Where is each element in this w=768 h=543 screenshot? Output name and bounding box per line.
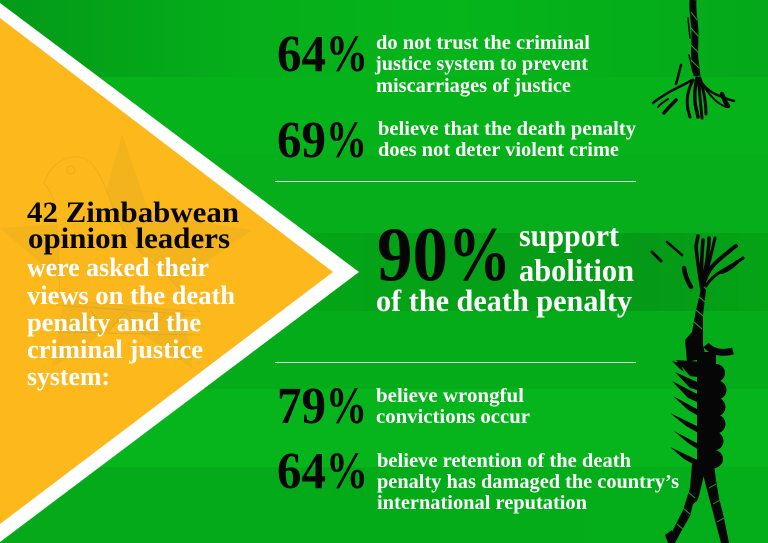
stat: 69% deter: % xyxy=(326,112,367,169)
left intro text xyxy=(27,253,236,391)
left heading xyxy=(27,196,239,255)
stat: 64% trust: justice system to prevent xyxy=(374,53,588,75)
noose: loose strand xyxy=(706,345,733,352)
stat: 90% abolition: of the death penalty xyxy=(376,283,632,318)
white arrow border xyxy=(0,3,359,542)
noose: frayed end xyxy=(652,236,743,290)
stat: 64% trust: 64 xyxy=(277,26,326,83)
noose: lower ropes xyxy=(668,464,706,543)
stat: 64% reputation xyxy=(277,443,679,514)
stat: 69% deter: 69 xyxy=(277,112,326,169)
stat: 90% abolition: abolition xyxy=(519,252,634,288)
icon: noose xyxy=(652,236,743,543)
noose: rope stem xyxy=(685,285,706,362)
stat: 79% wrongful: convictions occur xyxy=(376,406,530,428)
stat: 64% reputation: international reputation xyxy=(377,492,587,514)
stat: 64% trust: do not trust the criminal xyxy=(376,32,590,54)
left intro text: system: xyxy=(27,362,110,391)
stat: 79% wrongful: 79 xyxy=(277,378,326,435)
stat: 64% reputation: % xyxy=(326,443,368,500)
stat: 64% trust: miscarriages of justice xyxy=(376,75,571,97)
stat: 64% trust xyxy=(277,26,590,97)
stat: 64% reputation: penalty has damaged the country’s xyxy=(377,471,679,493)
left intro text: views on the death xyxy=(27,281,236,310)
stat: 64% trust: % xyxy=(326,26,368,83)
left heading: opinion leaders xyxy=(28,222,230,255)
left intro text: criminal justice xyxy=(27,335,203,364)
yellow arrow panel xyxy=(0,18,333,524)
stat: 79% wrongful: believe wrongful xyxy=(376,385,524,407)
stat: 69% deter: does not deter violent crime xyxy=(378,139,619,161)
stat: 90% abolition: support xyxy=(519,217,619,253)
left heading: 42 Zimbabwean xyxy=(27,196,239,229)
stat: 64% reputation: 64 xyxy=(277,443,326,500)
left intro text: were asked their xyxy=(27,253,209,282)
stat: 90% abolition: 90 xyxy=(377,211,448,297)
stat: 79% wrongful: % xyxy=(326,378,367,435)
icon: frayed rope top xyxy=(653,0,734,118)
stat: 90% abolition: % xyxy=(448,211,511,297)
watermark: star and bird emblem xyxy=(0,134,252,368)
stat: 79% wrongful xyxy=(277,378,530,435)
stat: 69% deter: believe that the death penalty xyxy=(378,118,636,140)
noose: coil spikes xyxy=(672,361,684,372)
noose: coils xyxy=(670,352,726,468)
left intro text: penalty and the xyxy=(27,308,201,337)
stat: 90% abolition xyxy=(376,211,634,318)
stat: 64% reputation: believe retention of the death xyxy=(377,450,631,472)
stat: 69% deter xyxy=(277,112,636,169)
